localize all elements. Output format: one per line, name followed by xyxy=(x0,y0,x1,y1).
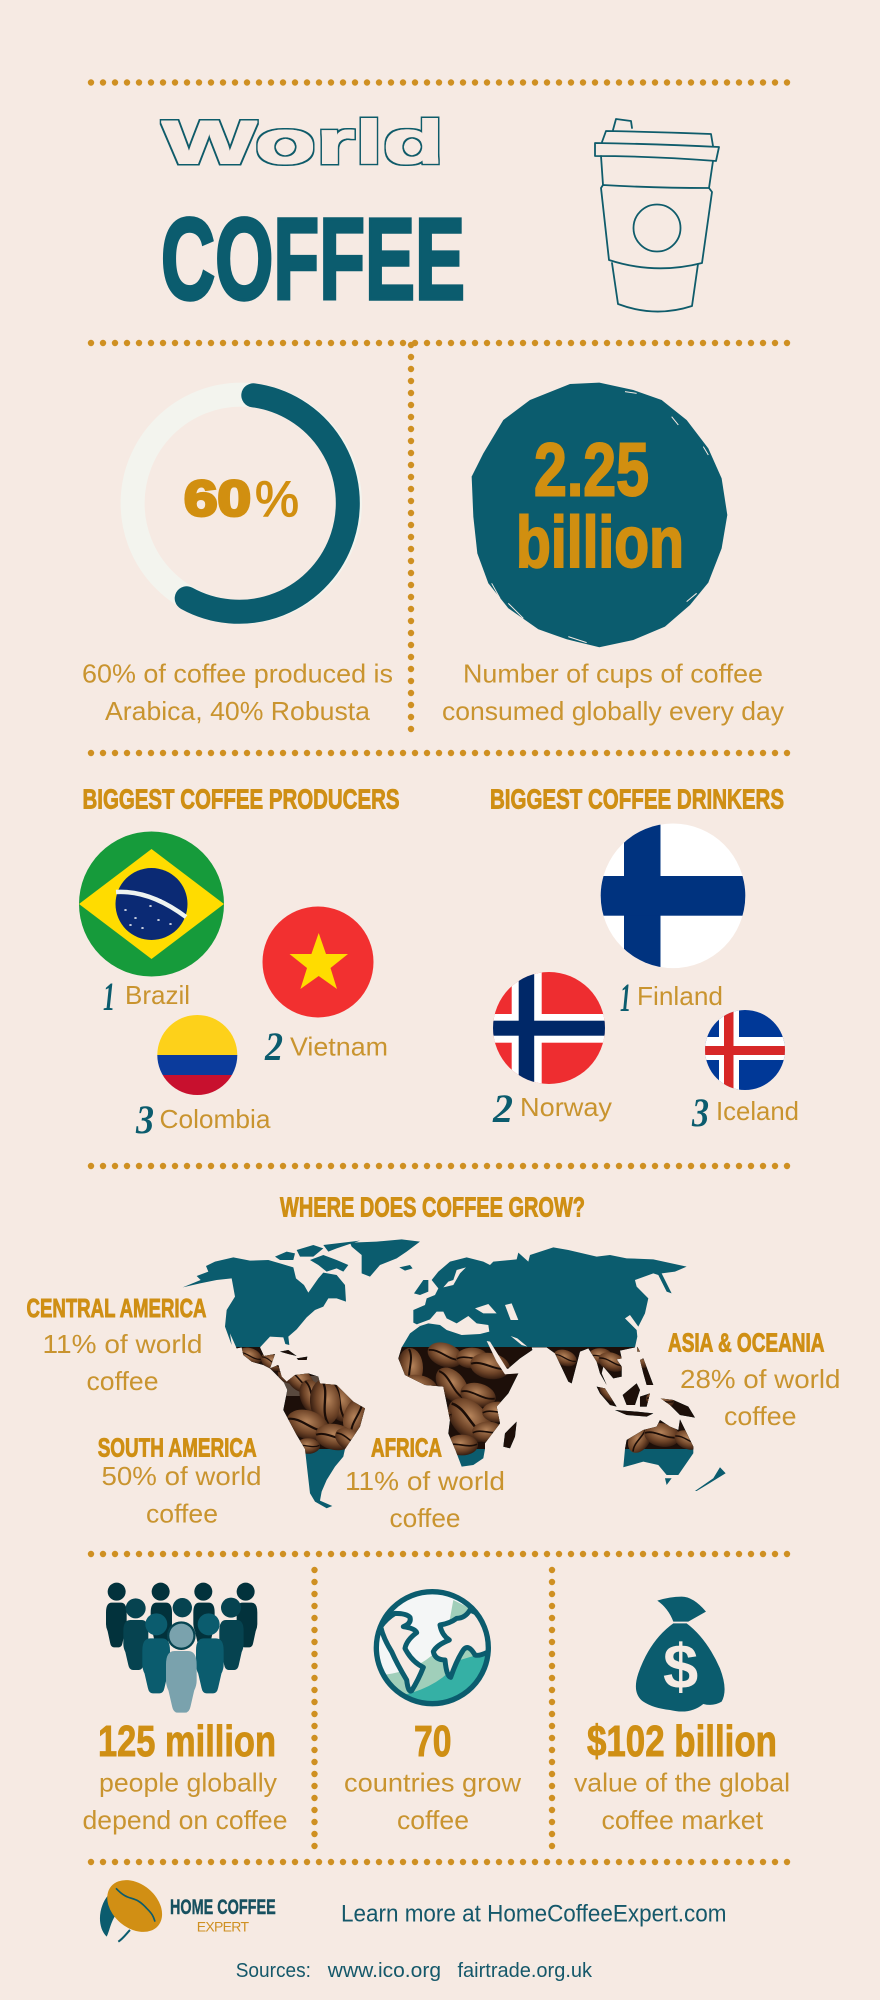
text: sources: www.ico.org xyxy=(327,1960,441,1982)
stat: 125 million: 125 million xyxy=(98,1717,276,1766)
label: 2 Norway: Norway xyxy=(520,1092,612,1122)
label: 3 Iceland: Iceland xyxy=(716,1096,799,1126)
label: 2 Norway: 2 xyxy=(492,1086,513,1131)
callout: South America: 50% of world xyxy=(102,1461,262,1491)
logo: Home Coffee Expert: HOME COFFEE xyxy=(170,1896,276,1919)
label: 2 Norway xyxy=(492,1086,612,1131)
stat: 125 million: people globally xyxy=(99,1768,277,1798)
heading: where does coffee grow: WHERE DOES COFFEE GROW? xyxy=(280,1192,585,1222)
donut value: 60 xyxy=(184,470,251,526)
callout: Africa: AFRICA xyxy=(371,1433,442,1463)
flag: Colombia xyxy=(155,1014,240,1097)
text: arabica share xyxy=(82,659,393,726)
callout: Africa xyxy=(345,1433,505,1533)
chart: 60% donut xyxy=(133,395,350,612)
callout: Asia and Oceania: coffee xyxy=(724,1401,796,1431)
flag: Norway xyxy=(490,970,608,1086)
text: arabica share: Arabica, 40% Robusta xyxy=(105,696,371,726)
icon: money bag xyxy=(636,1597,725,1712)
badge: 2.25 billion: billion xyxy=(516,503,684,583)
flag: Finland xyxy=(600,823,746,969)
label: 1 Finland: Finland xyxy=(637,981,723,1011)
label: 1 Brazil xyxy=(103,974,190,1019)
callout: Africa: 11% of world xyxy=(345,1466,505,1496)
heading: biggest drinkers: BIGGEST COFFEE DRINKERS xyxy=(490,784,784,814)
callout: Central America: 11% of world xyxy=(42,1329,202,1359)
logo: Home Coffee Expert: EXPERT xyxy=(197,1919,249,1935)
stat: 125 million xyxy=(82,1717,288,1835)
icon: takeaway coffee cup xyxy=(595,119,719,312)
stat: 70 countries: countries grow xyxy=(344,1768,521,1798)
world map with coffee bean band xyxy=(180,1230,730,1520)
callout: Asia and Oceania: ASIA & OCEANIA xyxy=(668,1328,825,1358)
title word: COFFEE: COFFEE xyxy=(161,194,465,324)
text: cups per day: Number of cups of coffee xyxy=(463,659,763,689)
text: sources: Sources: xyxy=(236,1960,311,1982)
stat: 102 billion xyxy=(574,1717,790,1835)
stat: 70 countries: coffee xyxy=(397,1805,469,1835)
donut value xyxy=(184,470,299,527)
text: cups per day: consumed globally every day xyxy=(442,696,784,726)
callout: South America: coffee xyxy=(146,1499,218,1529)
label: 3 Colombia: Colombia xyxy=(160,1104,271,1134)
callout: South America xyxy=(98,1433,262,1529)
callout: Asia and Oceania: 28% of world xyxy=(680,1364,840,1394)
text: arabica share: 60% of coffee produced is xyxy=(82,659,393,689)
icon: money bag: $ xyxy=(663,1632,698,1702)
callout: Asia and Oceania xyxy=(668,1328,840,1431)
label: 2 Vietnam xyxy=(264,1024,388,1069)
text: learn more link: Learn more at HomeCoffeeExpert.com xyxy=(341,1901,726,1928)
label: 2 Vietnam: 2 xyxy=(264,1024,283,1069)
icon: crowd of people xyxy=(106,1583,257,1713)
callout: Central America: CENTRAL AMERICA xyxy=(26,1293,207,1323)
flag: Iceland xyxy=(703,1008,787,1092)
stat: 102 billion: $102 billion xyxy=(587,1717,777,1766)
label: 3 Colombia xyxy=(135,1097,271,1142)
stat: 102 billion: coffee market xyxy=(602,1805,764,1835)
title xyxy=(161,109,465,324)
logo: Home Coffee Expert xyxy=(97,1869,276,1943)
stat: 70 countries xyxy=(344,1717,521,1835)
stat: 102 billion: value of the global xyxy=(574,1768,790,1798)
callout: Central America xyxy=(26,1293,207,1396)
text: sources xyxy=(236,1960,593,1982)
callout: Africa: coffee xyxy=(390,1503,460,1533)
badge: 2.25 billion xyxy=(472,383,727,647)
flag: Vietnam xyxy=(262,906,374,1018)
label: 3 Iceland xyxy=(691,1090,799,1135)
label: 1 Finland xyxy=(620,975,723,1020)
label: 3 Colombia: 3 xyxy=(135,1097,154,1142)
donut value: % xyxy=(255,471,299,527)
badge: 2.25 billion: 2.25 xyxy=(534,428,649,512)
stat: 70 countries: 70 xyxy=(414,1717,452,1766)
label: 1 Brazil: 1 xyxy=(103,974,115,1019)
heading: biggest producers: BIGGEST COFFEE PRODUCERS xyxy=(82,784,400,814)
callout: Central America: coffee xyxy=(86,1366,158,1396)
icon: coffee bean xyxy=(97,1869,172,1943)
stat: 125 million: depend on coffee xyxy=(82,1805,288,1835)
label: 3 Iceland: 3 xyxy=(691,1090,709,1135)
text: sources: fairtrade.org.uk xyxy=(458,1960,593,1982)
callout: South America: SOUTH AMERICA xyxy=(98,1433,257,1463)
label: 1 Finland: 1 xyxy=(620,975,631,1020)
flag: Brazil xyxy=(79,832,224,976)
title word: World: World xyxy=(162,109,444,176)
label: 1 Brazil: Brazil xyxy=(125,980,190,1010)
text: cups per day xyxy=(442,659,784,726)
label: 2 Vietnam: Vietnam xyxy=(290,1032,388,1062)
icon: globe xyxy=(373,1590,493,1707)
